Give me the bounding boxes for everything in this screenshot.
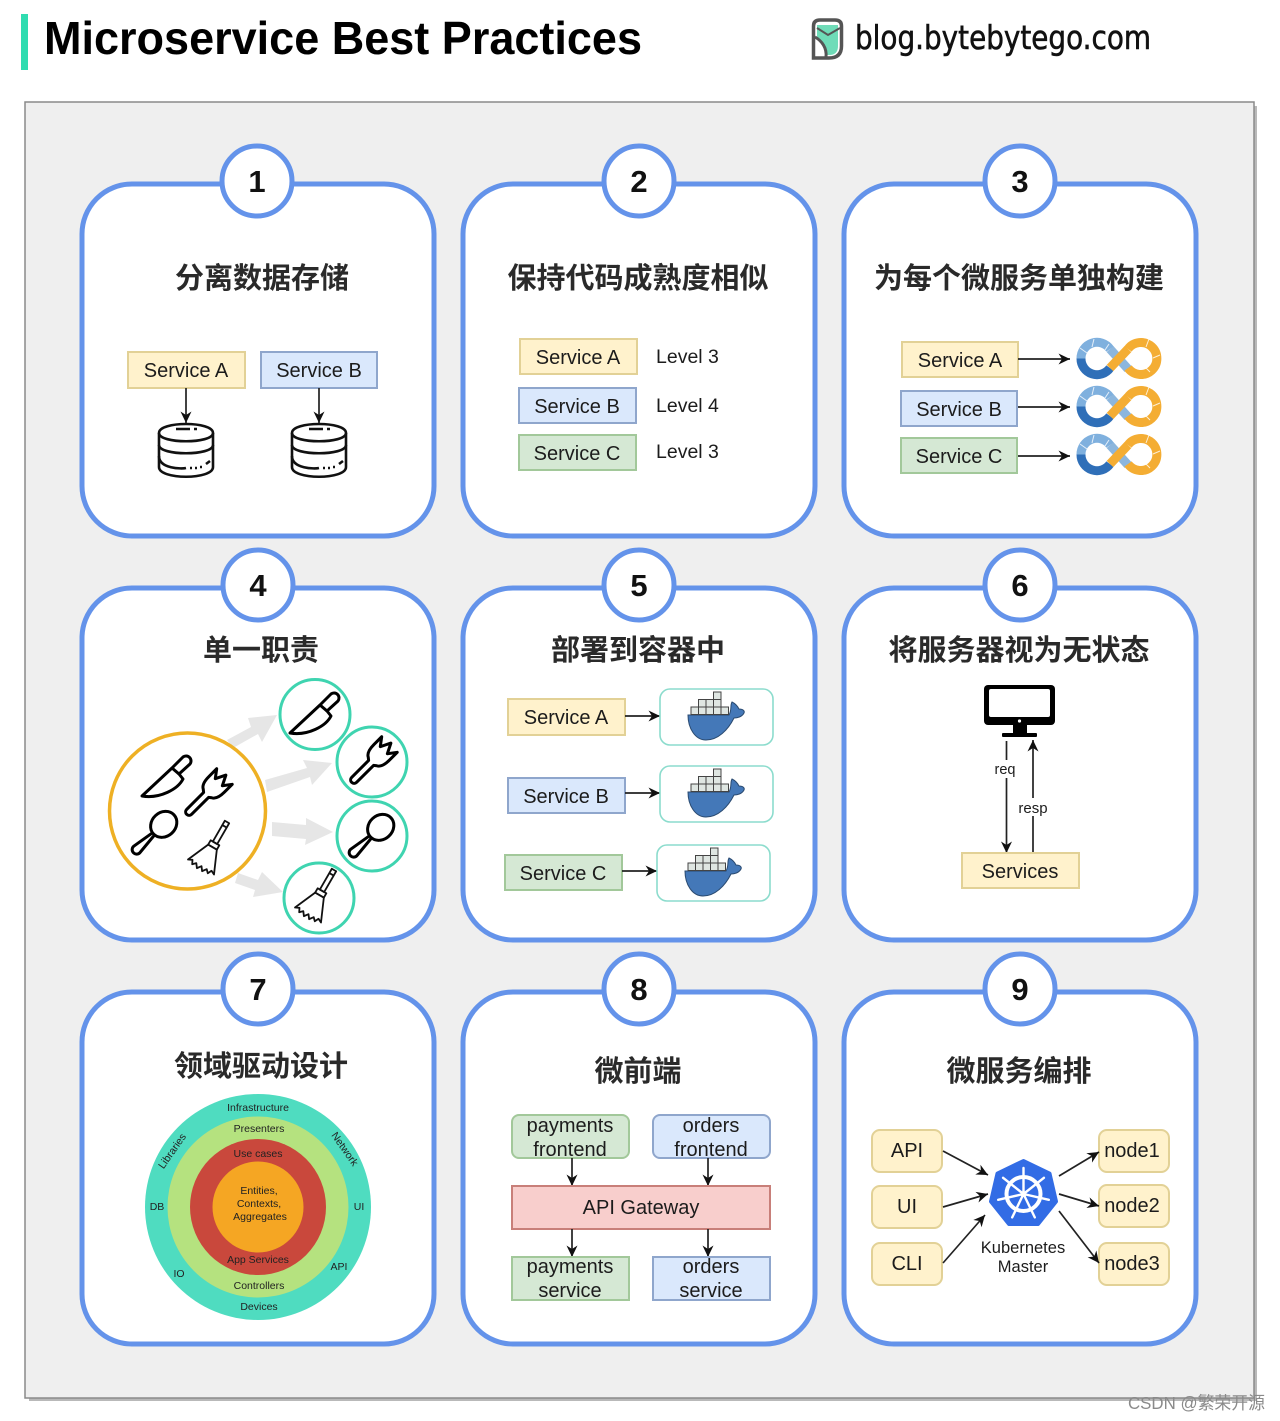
number badge 6 [985, 550, 1055, 620]
UI box: UI [897, 1196, 917, 1218]
number badge 5: 5 [630, 568, 648, 603]
arrows to services [572, 1229, 708, 1257]
arrows into master [943, 1151, 988, 1263]
card [844, 184, 1196, 536]
Service B row [519, 388, 719, 423]
Service B box: Service B [276, 360, 362, 382]
card [82, 184, 434, 536]
payments frontend: payments [527, 1115, 613, 1137]
concentric architecture diagram: Presenters [234, 1123, 284, 1135]
number badge 7 [223, 954, 293, 1024]
big circle with all tools [110, 733, 266, 889]
number badge 9 [985, 954, 1055, 1024]
panel 9: microservice orchestration [844, 954, 1196, 1344]
resp arrow: resp [1018, 800, 1048, 817]
heading: 分离数据存储 [175, 262, 349, 295]
req arrow [995, 741, 1015, 853]
Service C row [519, 435, 719, 470]
Service C container: Service C [520, 863, 606, 885]
arrows to gateway [572, 1158, 708, 1186]
Service B box [261, 352, 377, 388]
card [463, 184, 815, 536]
node3 box [1099, 1243, 1169, 1285]
spoon circle [337, 801, 407, 871]
orders service [653, 1256, 770, 1302]
icon: ByteByteGo logo [814, 20, 842, 58]
Service B row: Level 4 [656, 395, 719, 417]
number badge 7: 7 [249, 972, 267, 1007]
Service A container [508, 689, 773, 745]
number badge 2: 2 [630, 164, 648, 199]
concentric architecture diagram: Libraries [156, 1131, 189, 1171]
panel 4: single responsibility [82, 550, 434, 940]
panel 7: domain driven design [82, 954, 434, 1344]
Services box: Services [982, 861, 1058, 883]
orders frontend: frontend [674, 1139, 748, 1161]
API box [872, 1130, 942, 1172]
panel 8: micro frontends [463, 954, 815, 1344]
payments service: payments [527, 1256, 613, 1278]
number badge 8: 8 [630, 972, 648, 1007]
Service B pipeline: Service B [916, 399, 1002, 421]
concentric architecture diagram [145, 1094, 371, 1320]
icon: kubernetes logo [991, 1161, 1056, 1224]
UI box [872, 1186, 942, 1228]
number badge 1: 1 [248, 164, 266, 199]
Service A container: Service A [524, 707, 609, 729]
concentric architecture diagram: Aggregates [233, 1211, 287, 1223]
header accent bar [21, 14, 28, 70]
Service B container: Service B [523, 786, 609, 808]
concentric architecture diagram: App Services [227, 1254, 289, 1266]
panel 5: deploy in containers [463, 550, 815, 940]
icon: database B [292, 424, 346, 477]
Service A pipeline [902, 339, 1160, 377]
concentric architecture diagram: DB [150, 1201, 164, 1213]
number badge 4 [223, 550, 293, 620]
number badge 2 [604, 146, 674, 216]
Kubernetes Master label: Kubernetes [981, 1239, 1065, 1257]
website address: blog.bytebytego.com [855, 18, 1151, 57]
payments frontend [512, 1115, 629, 1161]
number badge 3 [985, 146, 1055, 216]
number badge 5 [604, 550, 674, 620]
card [82, 588, 434, 940]
concentric architecture diagram: Devices [240, 1301, 278, 1313]
card [82, 992, 434, 1344]
card [463, 588, 815, 940]
icon: monitor [984, 685, 1055, 737]
Kubernetes Master label: Master [998, 1258, 1049, 1276]
node2 box [1099, 1185, 1169, 1227]
Service B container [508, 766, 773, 822]
node2 box: node2 [1104, 1195, 1160, 1217]
knife circle [280, 680, 350, 750]
Service C row: Level 3 [656, 441, 719, 463]
panel 1: separate data storage [82, 146, 434, 536]
resp arrow [1018, 740, 1048, 853]
API Gateway: API Gateway [583, 1197, 699, 1219]
concentric architecture diagram: Use cases [233, 1148, 283, 1160]
concentric architecture diagram: Network [328, 1130, 361, 1169]
Service A row: Service A [536, 347, 621, 369]
CLI box: CLI [891, 1253, 923, 1275]
Services box [962, 853, 1079, 888]
node1 box: node1 [1104, 1140, 1160, 1162]
fork circle [337, 727, 407, 797]
Service B pipeline [901, 387, 1160, 426]
arrow A to database [185, 388, 187, 423]
number badge 6: 6 [1011, 568, 1029, 603]
heading: 单一职责 [203, 634, 319, 667]
number badge 3: 3 [1011, 164, 1029, 199]
arrows to nodes [1059, 1152, 1099, 1263]
icon: database A [159, 424, 213, 477]
node3 box: node3 [1104, 1253, 1160, 1275]
number badge 4: 4 [249, 568, 267, 603]
CLI box [872, 1243, 942, 1285]
payments frontend: frontend [533, 1139, 607, 1161]
card [844, 588, 1196, 940]
broom circle [284, 862, 354, 933]
concentric architecture diagram: UI [354, 1201, 364, 1213]
Service C pipeline: Service C [916, 446, 1002, 468]
Service C container [505, 845, 770, 901]
Service C pipeline [901, 435, 1160, 473]
concentric architecture diagram: Controllers [234, 1280, 284, 1292]
Service A row [520, 339, 719, 374]
node1 box [1099, 1130, 1169, 1172]
heading: 领域驱动设计 [174, 1050, 348, 1083]
Service A box: Service A [144, 360, 229, 382]
concentric architecture diagram: Entities, [240, 1185, 278, 1197]
Service B row: Service B [534, 396, 620, 418]
heading: 将服务器视为无状态 [888, 634, 1150, 667]
payments service: service [538, 1280, 602, 1302]
Service A pipeline: Service A [918, 350, 1003, 372]
number badge 8 [604, 954, 674, 1024]
orders frontend: orders [683, 1115, 739, 1137]
card [463, 992, 815, 1344]
orders service: service [679, 1280, 743, 1302]
arrow B to database [318, 388, 320, 423]
card [844, 992, 1196, 1344]
req arrow: req [995, 762, 1015, 778]
API box: API [891, 1140, 923, 1162]
heading: 微服务编排 [946, 1055, 1092, 1088]
panel 3: build each microservice separately [844, 146, 1196, 536]
panel 6: stateless servers [844, 550, 1196, 940]
heading: 保持代码成熟度相似 [507, 262, 769, 295]
Kubernetes Master label [981, 1239, 1065, 1276]
watermark: CSDN @繁荣开源 [1128, 1393, 1265, 1413]
API Gateway [512, 1186, 770, 1229]
concentric architecture diagram: Infrastructure [227, 1102, 289, 1114]
heading: 部署到容器中 [551, 634, 725, 667]
concentric architecture diagram: IO [173, 1268, 185, 1280]
concentric architecture diagram: API [331, 1261, 347, 1273]
orders frontend [653, 1115, 770, 1161]
payments service [512, 1256, 629, 1302]
gray arrows [227, 715, 333, 897]
Service C row: Service C [534, 443, 620, 465]
Service A row: Level 3 [656, 346, 719, 368]
number badge 1 [222, 146, 292, 216]
orders service: orders [683, 1256, 739, 1278]
heading: 微前端 [594, 1055, 682, 1088]
number badge 9: 9 [1011, 972, 1029, 1007]
concentric architecture diagram: Contexts, [237, 1198, 281, 1210]
Service A box [128, 352, 245, 388]
panel 2: similar code maturity [463, 146, 815, 536]
title: Microservice Best Practices [44, 12, 642, 64]
heading: 为每个微服务单独构建 [874, 262, 1164, 295]
